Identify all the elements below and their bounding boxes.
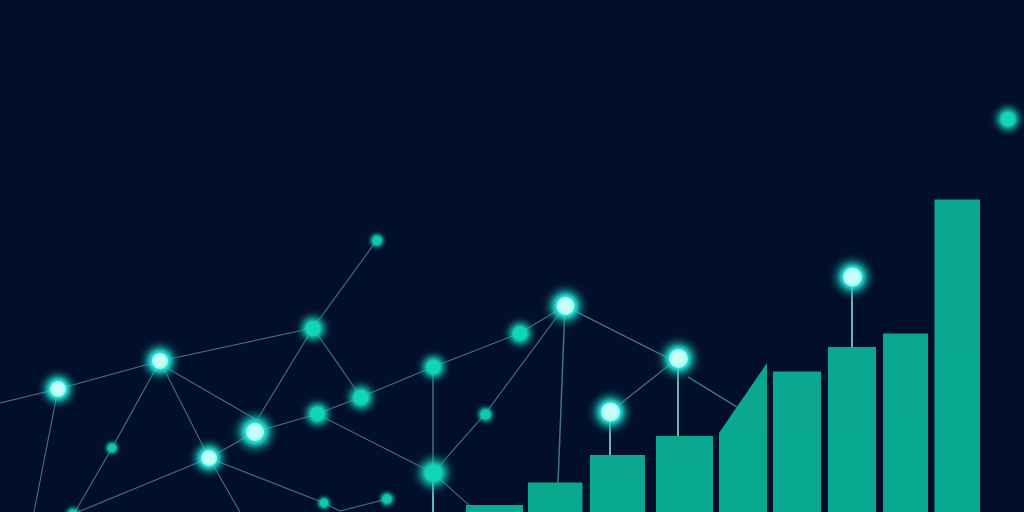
small node	[366, 230, 388, 252]
small node	[474, 402, 498, 426]
bar 6	[773, 372, 821, 512]
node	[137, 338, 183, 384]
node	[501, 314, 539, 352]
node	[828, 252, 878, 302]
small node	[376, 488, 398, 510]
isolated top-right node	[989, 100, 1024, 138]
node	[187, 436, 231, 480]
node	[341, 378, 381, 418]
small node	[314, 493, 334, 512]
network connection lines	[0, 240, 852, 512]
bar 2	[528, 482, 582, 512]
node	[540, 281, 590, 331]
node	[414, 348, 452, 386]
node	[293, 308, 333, 348]
clipped node at bottom edge	[62, 503, 84, 512]
bar 4	[656, 436, 713, 512]
teal nodes	[62, 100, 1024, 512]
node	[298, 395, 336, 433]
bar 9: tallest	[934, 200, 980, 512]
bright glowing nodes	[36, 252, 878, 480]
bar 1	[466, 505, 523, 512]
bar 8	[883, 334, 928, 512]
bar 3	[590, 455, 645, 512]
node	[410, 449, 458, 497]
bar 5: angled top	[719, 363, 767, 512]
small node	[102, 438, 122, 458]
bar 7	[828, 347, 876, 512]
node	[36, 367, 80, 411]
node	[654, 334, 704, 384]
node	[229, 406, 281, 458]
bar chart	[466, 200, 980, 512]
node	[586, 387, 636, 437]
